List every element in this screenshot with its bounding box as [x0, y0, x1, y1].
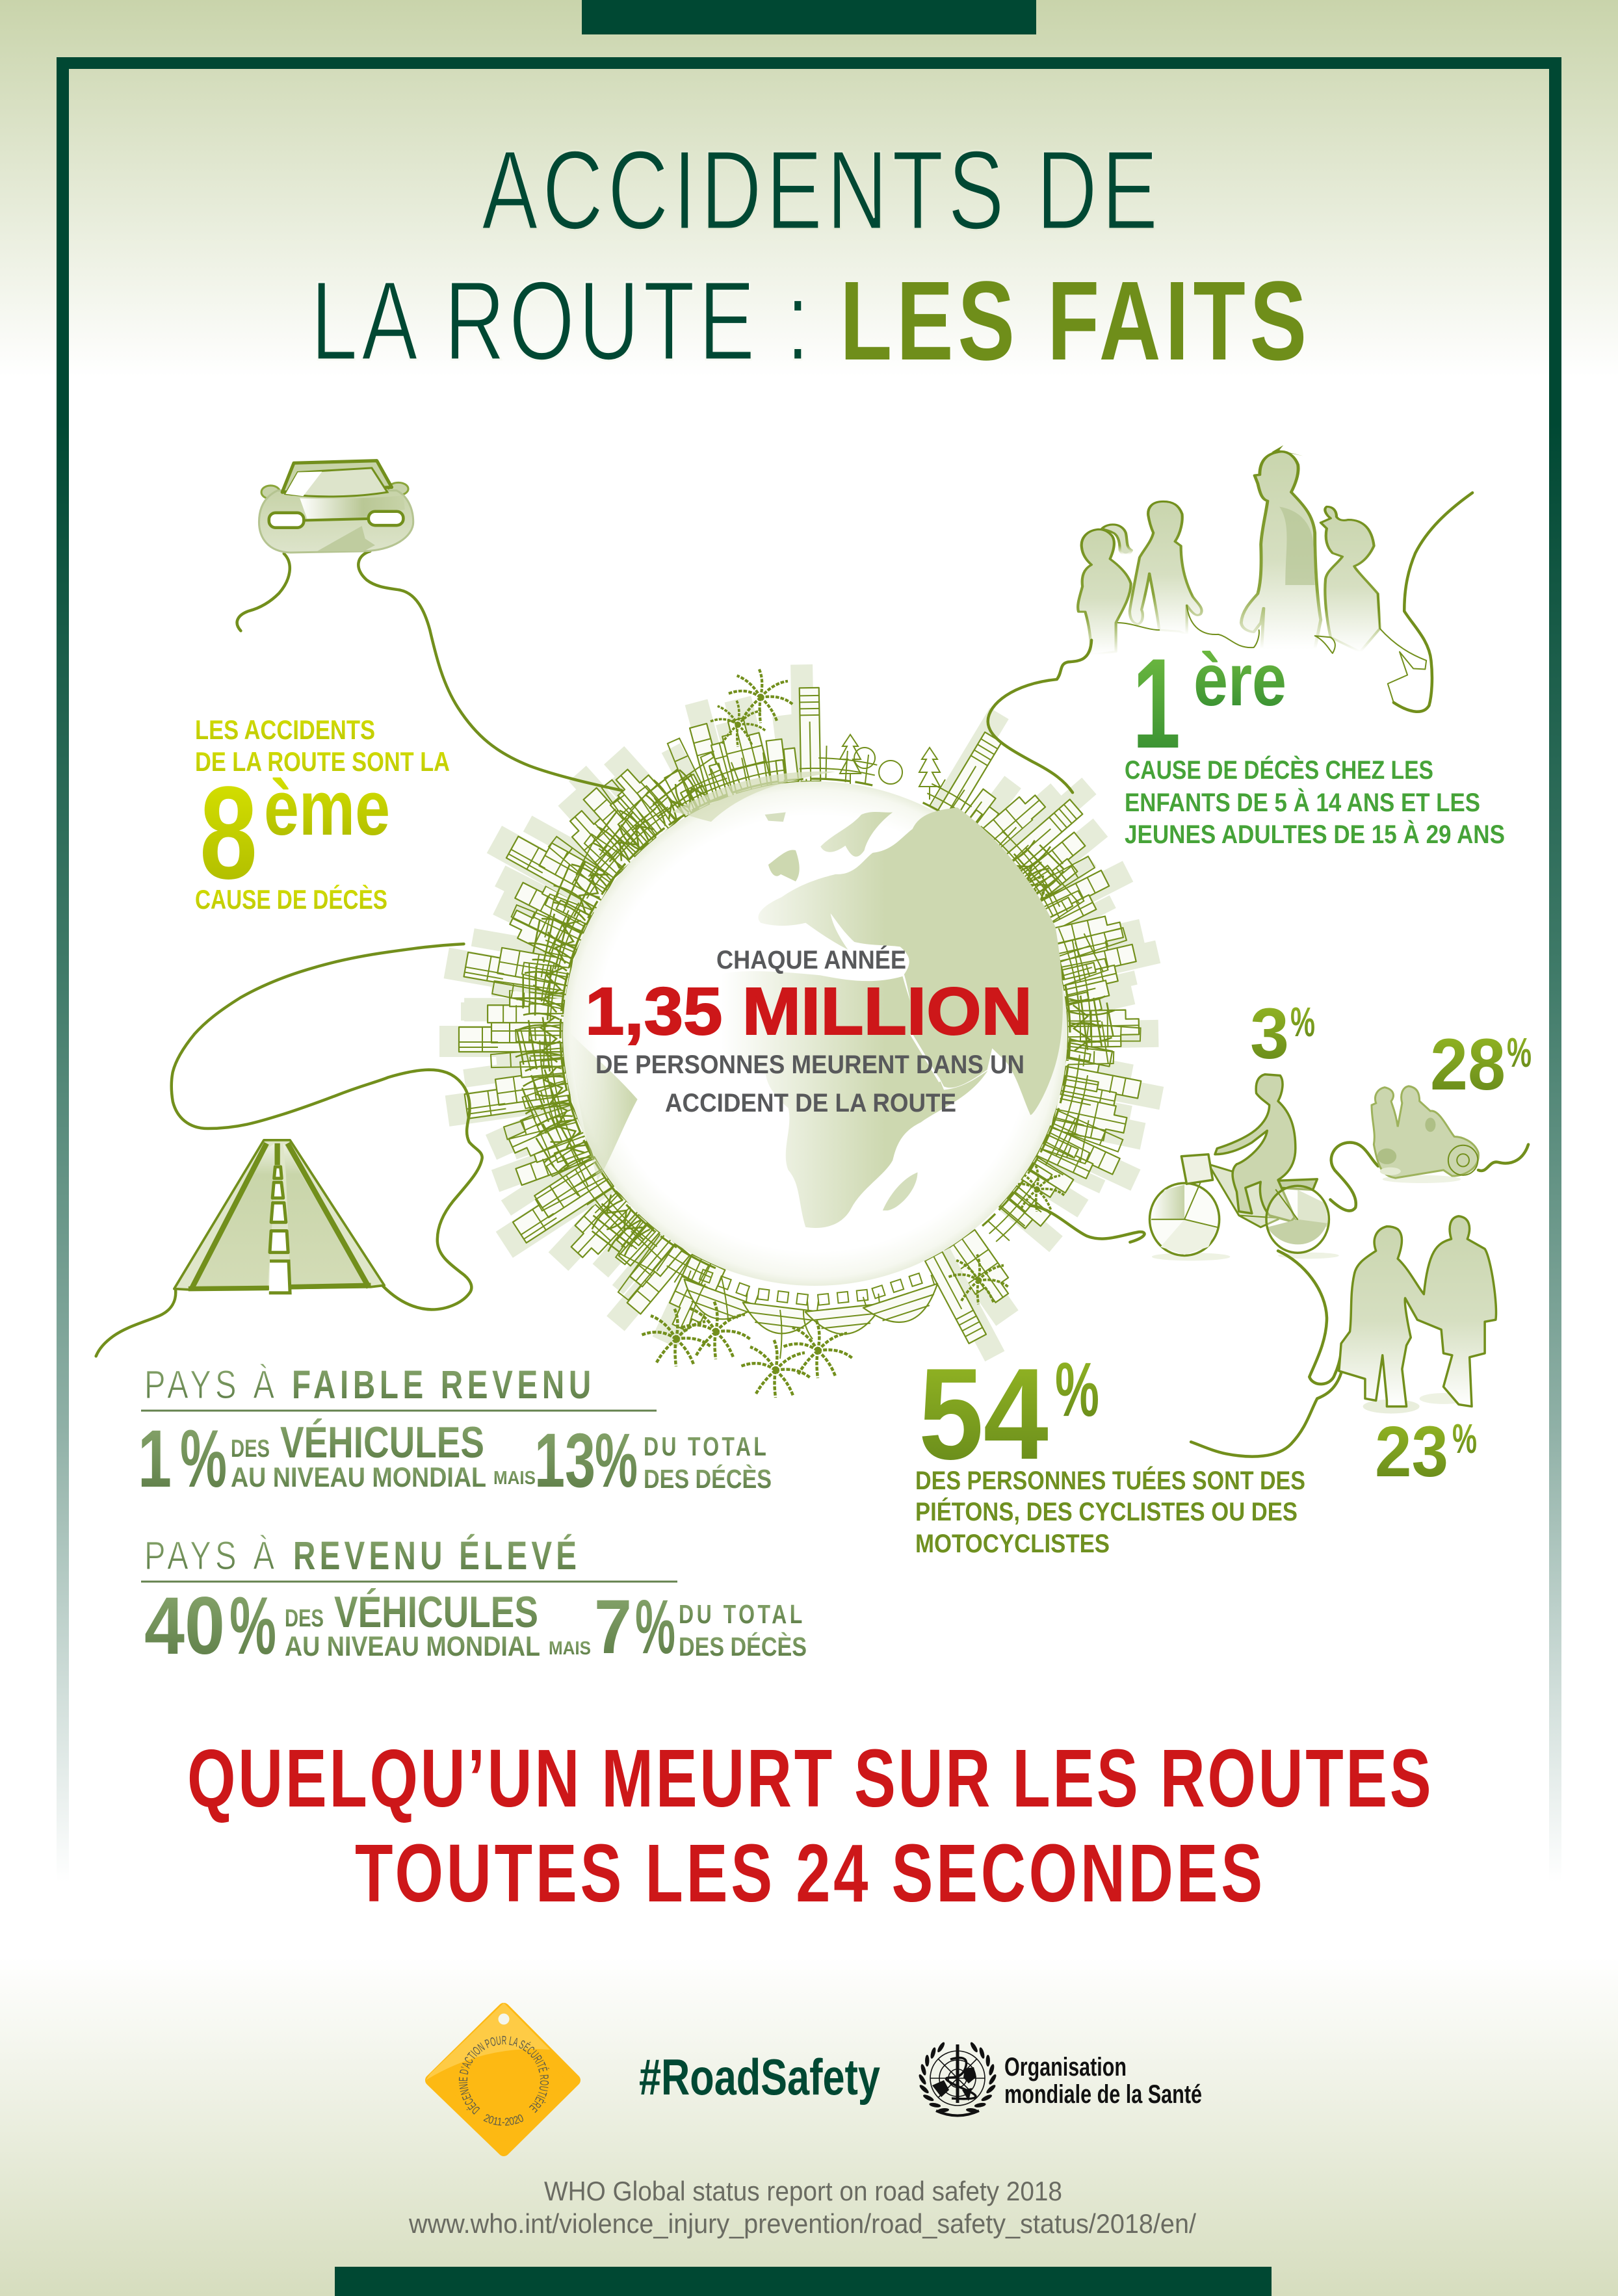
text: 1ère cause: ENFANTS DE 5 À 14 ANS ET LES [1125, 788, 1480, 817]
high income block: % [229, 1581, 276, 1671]
text: 8ème cause de décès [195, 714, 450, 915]
high income block [141, 1533, 807, 1671]
icon: boy [1130, 501, 1202, 634]
title: LA ROUTE : [311, 259, 809, 384]
text: 54 percent: PIÉTONS, DES CYCLISTES OU DES [915, 1497, 1298, 1526]
icon: car [259, 461, 413, 553]
text: percentages: % [1452, 1415, 1477, 1462]
logo: decade of action diamond [425, 2003, 581, 2156]
wire: car tail left [237, 554, 290, 631]
icon: man [1241, 445, 1321, 649]
top bar [582, 0, 1036, 34]
high income block: 40 [144, 1581, 225, 1671]
icon: pedestrians [1339, 1216, 1496, 1413]
high income block: % [635, 1584, 675, 1670]
low income block: FAIBLE REVENU [292, 1362, 591, 1407]
low income block: % [595, 1418, 638, 1504]
text: 54 percent: DES PERSONNES TUÉES SONT DES [915, 1466, 1305, 1495]
wire: bicycle to pedestrians [1278, 1251, 1341, 1384]
text: globe centre: ACCIDENT DE LA ROUTE [665, 1089, 956, 1117]
low income block [138, 1362, 772, 1504]
low income block: DES DÉCÈS [644, 1464, 772, 1494]
wire: pedestrians tail [1191, 1373, 1341, 1457]
text: percentages: % [1290, 998, 1315, 1045]
globe with city ring [439, 664, 1164, 1398]
background: white middle [0, 377, 1618, 1957]
wire: motorcycle tail [1478, 1145, 1528, 1171]
source text: www.who.int/violence_injury_prevention/road_safety_status/2018/en/ [408, 2208, 1196, 2239]
text: 54 percent: 54 [919, 1342, 1049, 1487]
text: 54 percent: % [1055, 1347, 1099, 1433]
trees and palms [641, 668, 1065, 1398]
low income block: MAIS [493, 1468, 536, 1489]
icon: road [174, 1140, 384, 1293]
WHO name: Organisation [1004, 2053, 1127, 2081]
logo: decade of action diamond: 2011-2020 [484, 2114, 523, 2126]
globe sphere [563, 781, 1067, 1286]
high income block: AU NIVEAU MONDIAL [285, 1631, 540, 1662]
icon: motorcycle [1372, 1086, 1478, 1183]
wire: road tail [96, 1289, 176, 1356]
wire: people tail [1394, 493, 1472, 712]
tagline: QUELQU’UN MEURT SUR LES ROUTES [187, 1732, 1431, 1824]
background: bottom gradient band [0, 1957, 1618, 2296]
continents [569, 772, 1063, 1228]
text: 1ère cause: CAUSE DE DÉCÈS CHEZ LES [1125, 755, 1433, 785]
text: percentages: 23 [1375, 1412, 1448, 1492]
bottom bar [335, 2267, 1272, 2296]
wire: linking people [1118, 605, 1259, 647]
title: ACCIDENTS DE [482, 128, 1158, 253]
text: globe centre [585, 945, 1032, 1117]
icon: woman [1315, 506, 1426, 703]
source text [408, 2176, 1196, 2239]
WHO name: mondiale de la Santé [1004, 2080, 1202, 2109]
text: 54 percent: MOTOCYCLISTES [915, 1530, 1110, 1558]
wire: globe to bicycle [1030, 1206, 1145, 1242]
tagline: TOUTES LES 24 SECONDES [355, 1827, 1262, 1919]
text: 1ère cause: JEUNES ADULTES DE 15 À 29 ANS [1125, 820, 1505, 849]
title [311, 128, 1307, 384]
logo: WHO emblem [918, 2041, 997, 2115]
wire: globe to road [172, 944, 482, 1310]
text: 8ème cause de décès: LES ACCIDENTS [195, 714, 375, 745]
high income block: DES [285, 1605, 324, 1632]
text: globe centre: 1,35 MILLION [585, 974, 1032, 1049]
people group [1078, 445, 1426, 703]
text: 1ère cause: ère [1194, 639, 1286, 722]
wire: globe to people [988, 640, 1091, 792]
text: percentages: % [1507, 1029, 1532, 1076]
low income block: 1 [138, 1414, 172, 1504]
icon: cyclist [1149, 1075, 1339, 1260]
WHO name [1004, 2053, 1202, 2109]
text: globe centre: DE PERSONNES MEURENT DANS UN [595, 1050, 1024, 1079]
text: percentages: 3 [1250, 994, 1289, 1074]
text: 1ère cause: 1 [1132, 632, 1181, 775]
source text: WHO Global status report on road safety 2018 [544, 2176, 1062, 2206]
high income block: PAYS À [144, 1533, 274, 1578]
hashtag: #RoadSafety [639, 2048, 880, 2106]
low income block: DU TOTAL [644, 1431, 766, 1461]
low income block: 13 [534, 1418, 595, 1504]
high income block: MAIS [549, 1638, 591, 1659]
text: percentages: 28 [1430, 1024, 1506, 1105]
high income block: 7 [594, 1584, 632, 1670]
text: 8ème cause de décès: DE LA ROUTE SONT LA [195, 746, 450, 777]
low income block: VÉHICULES [280, 1418, 484, 1467]
text: 8ème cause de décès: ème [264, 764, 390, 852]
icon: girl [1078, 501, 1202, 655]
frame [57, 57, 1561, 1882]
text: globe centre: CHAQUE ANNÉE [716, 945, 906, 974]
wire: car to globe [358, 551, 621, 790]
low income block: AU NIVEAU MONDIAL [231, 1462, 486, 1493]
text: percentages [1250, 994, 1532, 1492]
low income block: PAYS À [144, 1363, 274, 1407]
low income block: % [180, 1414, 227, 1504]
background: top gradient band [0, 0, 1618, 377]
high income block: REVENU ÉLEVÉ [293, 1533, 577, 1578]
high income block: DU TOTAL [679, 1599, 802, 1629]
high income block: VÉHICULES [334, 1587, 538, 1637]
tagline [187, 1732, 1431, 1919]
text: 1ère cause [1125, 632, 1505, 849]
city buildings ring [439, 664, 1164, 1364]
text: 54 percent [915, 1342, 1305, 1558]
wire: bicycle to motorcycle [1330, 1143, 1378, 1211]
text: 8ème cause de décès: 8 [200, 759, 257, 907]
logo: decade of action diamond: DÉCENNIE D’ACTION POUR LA SÉCURITÉ ROUTIÈRE [459, 2036, 549, 2115]
text: 8ème cause de décès: CAUSE DE DÉCÈS [195, 884, 387, 915]
boats [675, 1264, 946, 1338]
title: LES FAITS [840, 257, 1307, 384]
low income block: DES [231, 1435, 270, 1463]
high income block: DES DÉCÈS [679, 1632, 807, 1662]
